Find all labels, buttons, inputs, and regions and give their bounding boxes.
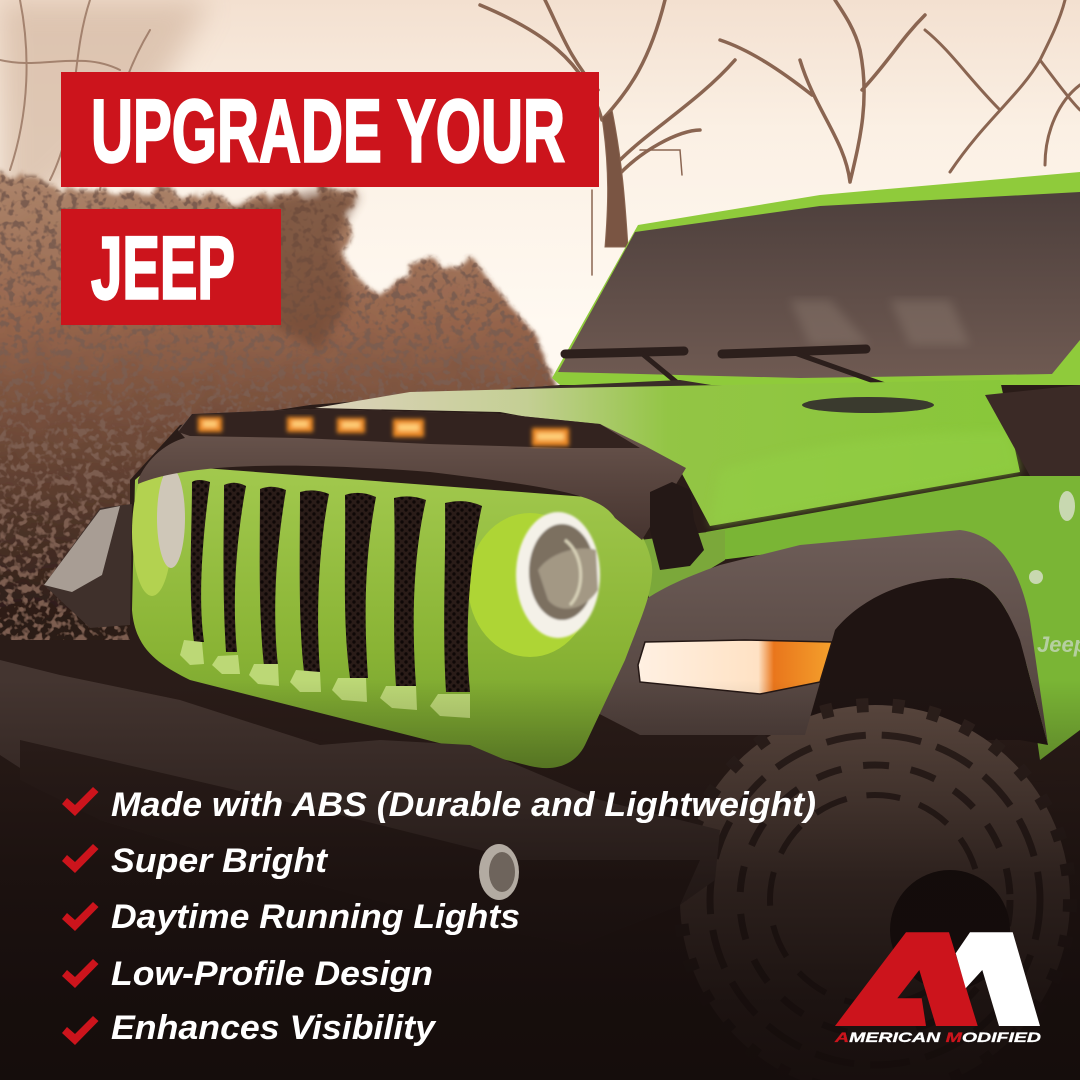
wipers — [565, 349, 885, 385]
item: low-profile design: Low-Profile Design — [111, 955, 433, 993]
cowl dark panel — [985, 385, 1080, 476]
item: enhances visibility: Enhances Visibility — [111, 1009, 437, 1047]
bumper — [0, 660, 720, 945]
body side — [706, 476, 1080, 760]
hood latch — [650, 482, 704, 570]
grille slots — [191, 480, 482, 692]
title banner: jeep — [61, 209, 281, 325]
far fender — [44, 504, 132, 628]
logo: american modified — [834, 932, 1041, 1045]
right headlight surround — [468, 513, 592, 657]
feature checklist — [62, 786, 816, 1047]
right headlight lens — [516, 512, 600, 638]
bottom dark overlay — [0, 680, 1080, 1080]
body base — [130, 385, 1080, 800]
wheel arch — [805, 578, 1048, 745]
pine silhouette — [230, 190, 360, 350]
visor lip — [138, 409, 686, 540]
fog light — [479, 844, 519, 900]
amber lights — [198, 417, 569, 446]
logo: american modified: A MERICAN M ODIFIED — [834, 1029, 1041, 1045]
item: super bright: Super Bright — [111, 842, 329, 880]
turn signal — [638, 640, 832, 694]
windshield frame — [552, 172, 1080, 385]
tree line left — [0, 150, 560, 720]
item: made with abs: Made with ABS (Durable and Lightweight) — [111, 786, 816, 824]
item: daytime running lights: Daytime Running Lights — [111, 898, 520, 936]
title banner: upgrade your: UPGRADE YOUR — [91, 80, 565, 180]
grille panel — [132, 466, 652, 768]
ground — [0, 640, 1080, 1080]
grille tabs — [180, 640, 470, 718]
title banner: upgrade your — [61, 72, 599, 187]
windshield glass — [558, 192, 1080, 378]
hood — [315, 380, 1020, 526]
fender flare — [588, 530, 1048, 745]
bare tree branches — [0, 0, 1080, 275]
title banner: jeep: JEEP — [91, 218, 235, 318]
tire — [680, 705, 1070, 1080]
left headlight — [132, 468, 172, 596]
